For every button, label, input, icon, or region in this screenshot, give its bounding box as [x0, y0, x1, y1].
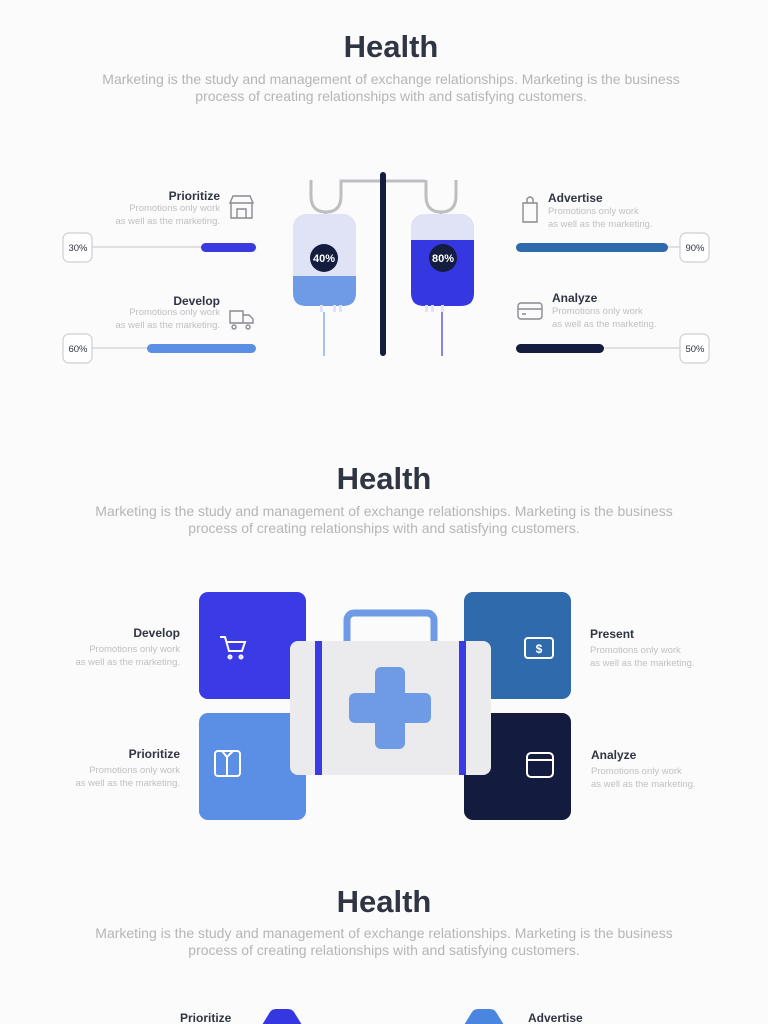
text: Promotions only work	[89, 644, 180, 655]
subtitle 3	[95, 925, 673, 958]
text: Promotions only work	[129, 203, 220, 214]
IV chart graphic: 30%	[68, 243, 88, 254]
label: Present: Present	[590, 627, 634, 641]
title 1: Health	[344, 29, 438, 64]
IV chart graphic	[62, 172, 710, 364]
text: Promotions only work	[552, 306, 643, 317]
subtitle 2: process of creating relationships with and satisfying customers.	[188, 520, 580, 536]
subtitle 1: process of creating relationships with and satisfying customers.	[195, 88, 587, 104]
label: Prioritize: Prioritize	[129, 747, 180, 761]
label: Develop: Develop	[133, 626, 180, 640]
label: Advertise: Advertise	[548, 191, 603, 205]
text: Promotions only work	[591, 766, 682, 777]
text: as well as the marketing.	[115, 320, 220, 330]
bars	[92, 247, 680, 348]
pole	[380, 172, 386, 356]
subtitle 3: process of creating relationships with and satisfying customers.	[188, 942, 580, 958]
text: as well as the marketing.	[115, 216, 220, 226]
hanger	[311, 180, 456, 218]
text: as well as the marketing.	[591, 778, 696, 790]
right bag	[411, 214, 474, 356]
IV chart graphic: 50%	[685, 344, 705, 355]
subtitle 1	[102, 71, 680, 104]
icons	[230, 196, 542, 329]
label: Analyze: Analyze	[591, 748, 636, 762]
bottom partial row	[180, 1009, 583, 1024]
text: as well as the marketing.	[75, 656, 180, 668]
title 3: Health	[337, 884, 431, 919]
title 2: Health	[337, 461, 431, 496]
text: as well as the marketing.	[548, 218, 653, 230]
text: as well as the marketing.	[552, 318, 657, 330]
IV chart graphic: 90%	[685, 243, 705, 254]
text: as well as the marketing.	[590, 658, 695, 668]
text: Promotions only work	[89, 765, 180, 776]
subtitle 1: Marketing is the study and management of exchange relationships. Marketing is the business	[102, 71, 680, 87]
first aid kit graphic: $	[536, 642, 543, 656]
left bag: 40%	[313, 253, 335, 265]
first aid kit graphic	[199, 592, 571, 820]
label: Analyze: Analyze	[552, 291, 597, 305]
subtitle 2	[95, 503, 673, 536]
text: Promotions only work	[590, 645, 681, 656]
text: as well as the marketing.	[75, 778, 180, 788]
subtitle 3: Marketing is the study and management of exchange relationships. Marketing is the business	[95, 925, 673, 941]
subtitle 2: Marketing is the study and management of exchange relationships. Marketing is the business	[95, 503, 673, 519]
text: Promotions only work	[129, 307, 220, 318]
IV chart graphic: 60%	[68, 344, 88, 355]
left bag	[293, 214, 356, 356]
label: Develop: Develop	[173, 294, 220, 308]
text: Promotions only work	[548, 206, 639, 217]
right bag: 80%	[432, 253, 454, 265]
label: Prioritize: Prioritize	[169, 189, 220, 203]
